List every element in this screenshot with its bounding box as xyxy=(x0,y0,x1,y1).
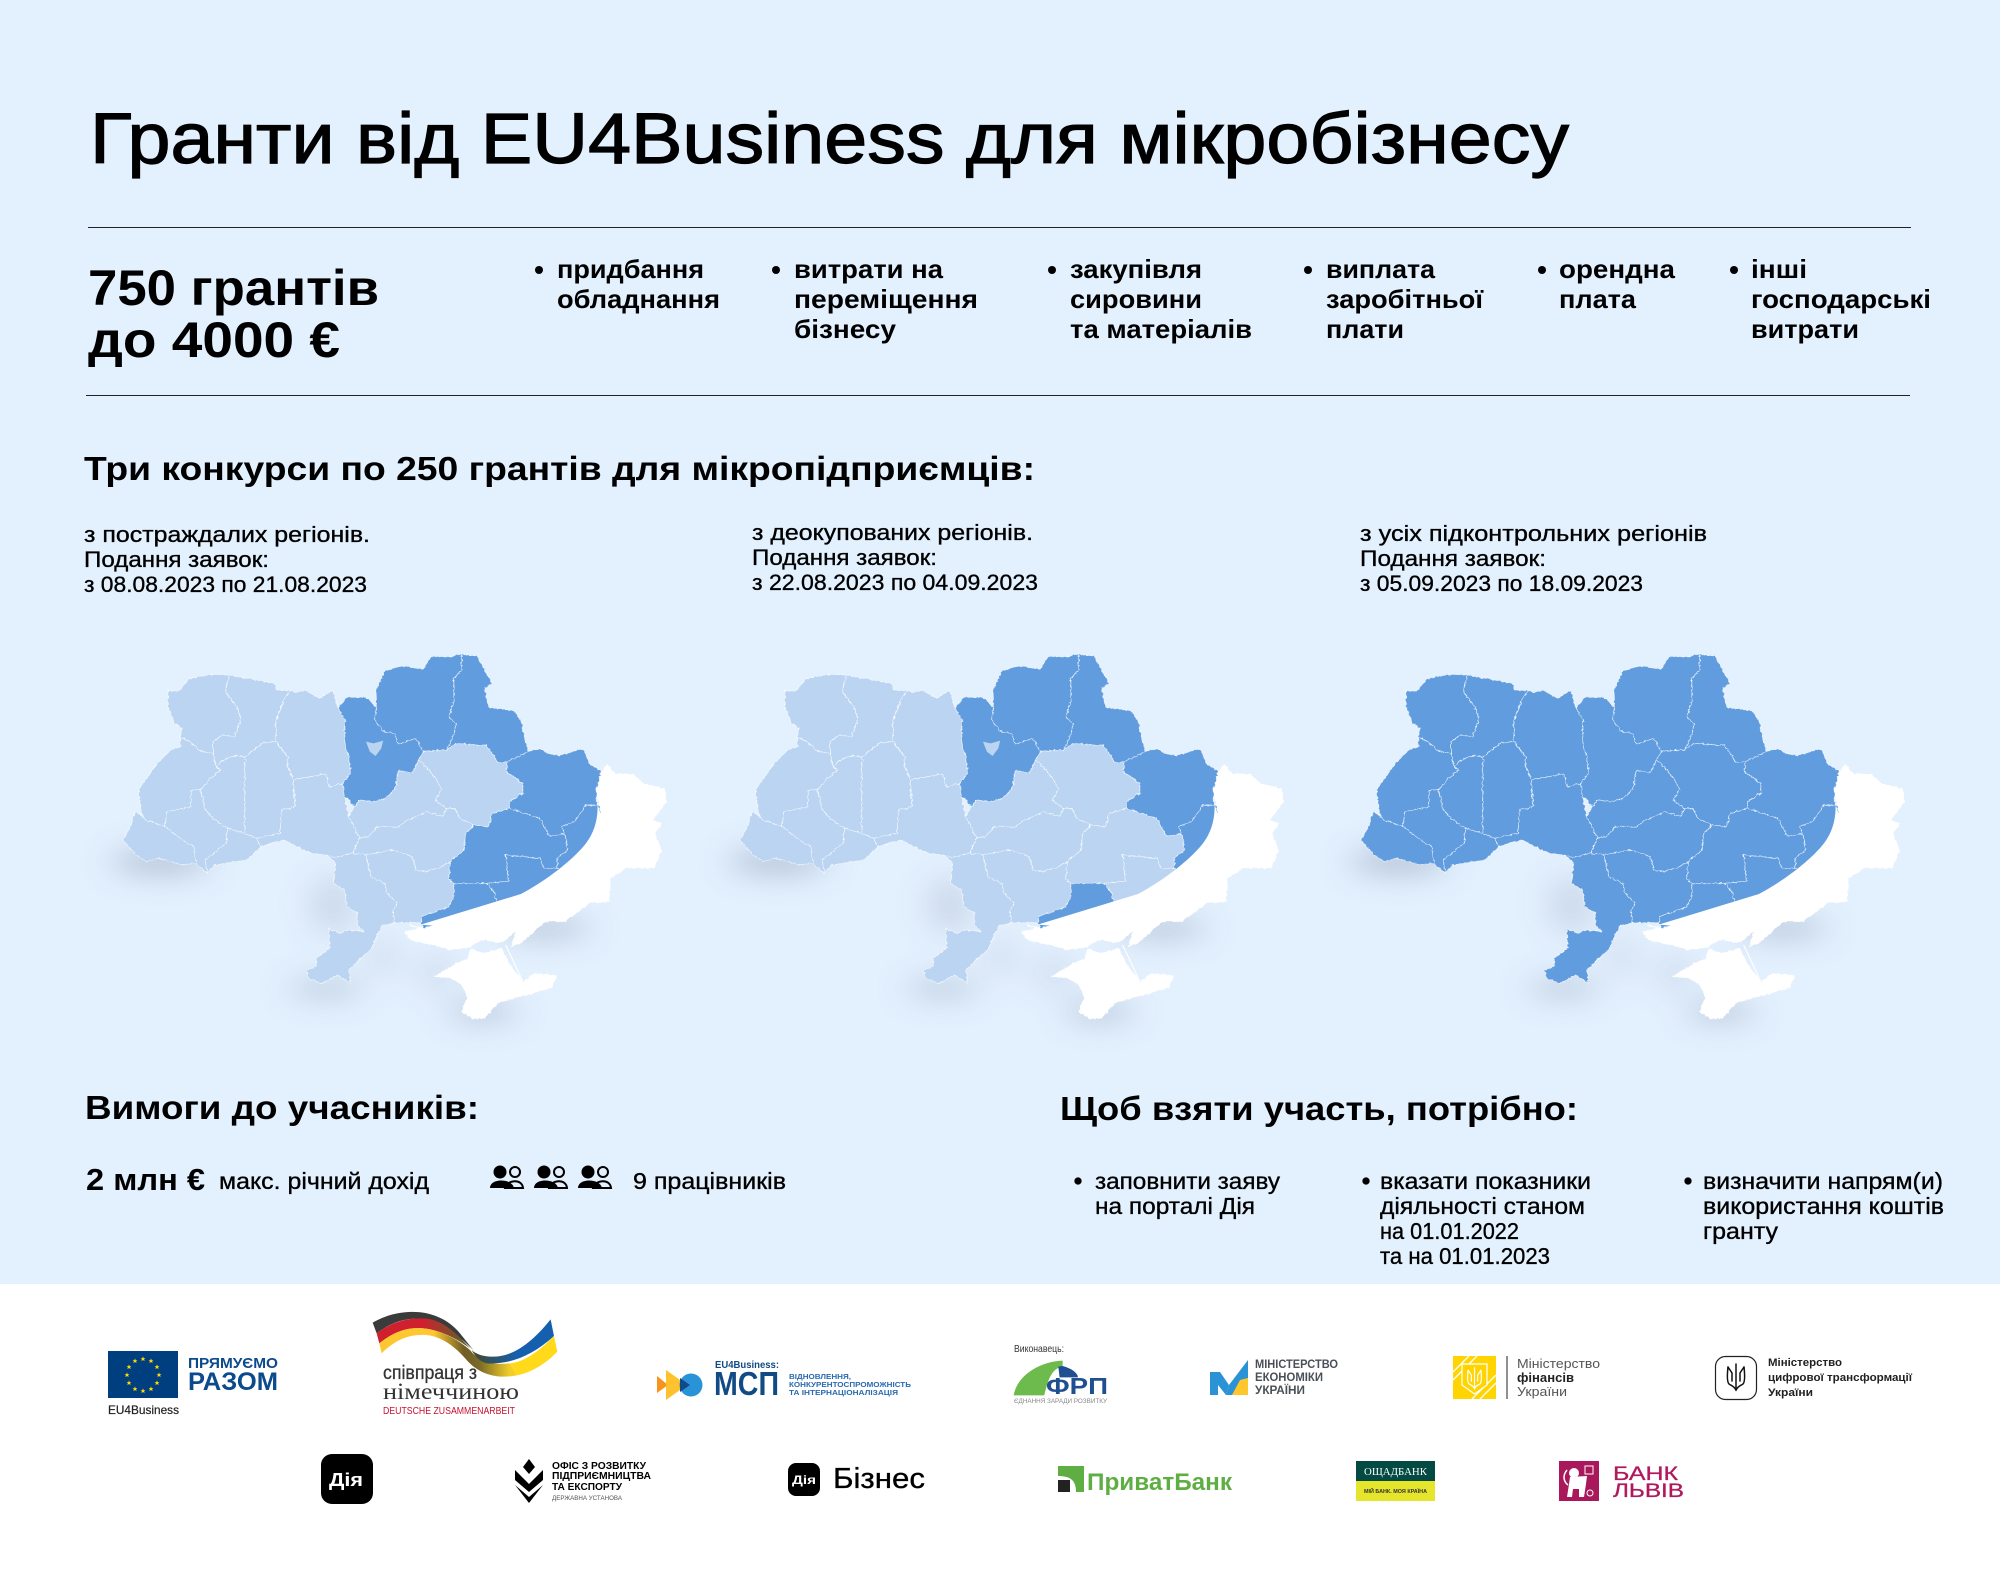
logo: ПриватБанк: ПриватБанк xyxy=(1087,1469,1233,1496)
expense: relocation: витрати на xyxy=(794,254,944,284)
map 1: affected regions xyxy=(111,654,667,1021)
expense: relocation: бізнесу xyxy=(794,314,897,344)
competition 1 text xyxy=(84,522,370,597)
step 3: визначити напрям(и) xyxy=(1703,1168,1943,1194)
expense: rent: орендна xyxy=(1559,254,1676,284)
logo: EU4Business МСП xyxy=(657,1359,912,1402)
logo: cooperation with Germany: DEUTSCHE ZUSAMMENARBEIT xyxy=(383,1406,515,1417)
occupied territories xyxy=(1021,764,1284,1019)
logo: EU4Business xyxy=(108,1351,278,1417)
logo: cooperation with Germany xyxy=(373,1312,557,1417)
logo: Ministry of Finance: Міністерство xyxy=(1517,1356,1600,1371)
requirement: employees: 9 працівників xyxy=(633,1168,786,1194)
step 2: та на 01.01.2023 xyxy=(1380,1243,1550,1269)
expense: raw materials: закупівля xyxy=(1070,254,1202,284)
step 1 xyxy=(1074,1168,1280,1219)
competition 1 text: з 08.08.2023 по 21.08.2023 xyxy=(84,572,367,597)
competition 3 text: Подання заявок: xyxy=(1360,546,1546,571)
requirement: income xyxy=(86,1162,429,1197)
logo: Ministry of Finance: фінансів xyxy=(1517,1370,1574,1385)
logo: Office for Entrepreneurship and Export: ОФІС З РОЗВИТКУ xyxy=(552,1461,647,1472)
title: Гранти від EU4Business для мікробізнесу xyxy=(90,100,1570,179)
step 3: гранту xyxy=(1703,1218,1778,1244)
expense: other xyxy=(1730,254,1931,344)
logo: EU4Business МСП: ТА ІНТЕРНАЦІОНАЛІЗАЦІЯ xyxy=(789,1388,898,1397)
light regions xyxy=(123,674,523,983)
expense: equipment: придбання xyxy=(557,254,704,284)
expense: salaries xyxy=(1304,254,1484,344)
logo: Office for Entrepreneurship and Export: ТА ЕКСПОРТУ xyxy=(552,1482,623,1493)
heading: how to participate: Щоб взяти участь, потрібно: xyxy=(1060,1090,1578,1127)
competition 2 text: з 22.08.2023 по 04.09.2023 xyxy=(752,570,1038,595)
logo: EU4Business МСП: МСП xyxy=(714,1365,779,1402)
logo: cooperation with Germany: співпраця з xyxy=(383,1363,477,1384)
competition 3 text: з усіх підконтрольних регіонів xyxy=(1360,521,1707,546)
map 2: de-occupied regions xyxy=(728,654,1284,1021)
logo: Дія Бізнес xyxy=(788,1463,925,1496)
headline figures: 750 грантів xyxy=(88,260,379,316)
logo: EU4Business МСП: КОНКУРЕНТОСПРОМОЖНІСТЬ xyxy=(789,1380,912,1389)
expense: relocation: переміщення xyxy=(794,284,978,314)
expense: salaries: виплата xyxy=(1326,254,1436,284)
logo: EU4Business МСП: EU4Business: xyxy=(715,1359,779,1371)
logo: EU4Business МСП: ВІДНОВЛЕННЯ, xyxy=(789,1372,851,1381)
logo: Ministry of Economy: МІНІСТЕРСТВО xyxy=(1255,1357,1338,1371)
expense: rent: плата xyxy=(1559,284,1637,314)
headline figures xyxy=(88,260,379,368)
highlighted regions xyxy=(955,654,1226,928)
logo: EU4Business: ПРЯМУЄМО xyxy=(188,1355,278,1372)
map 3: all controlled regions xyxy=(1349,654,1905,1021)
expense: raw materials: сировини xyxy=(1070,284,1202,314)
logo: Дія: Дія xyxy=(329,1470,363,1490)
expense: salaries: заробітньої xyxy=(1326,284,1484,314)
logo: cooperation with Germany: німеччиною xyxy=(383,1379,519,1404)
logo: ФРП xyxy=(1014,1343,1108,1405)
logo: Банк Львів: БАНК xyxy=(1613,1464,1678,1485)
logo: Дія Бізнес: Бізнес xyxy=(833,1463,925,1495)
competition 2 text xyxy=(752,520,1038,595)
logo: Ministry of Finance: України xyxy=(1517,1384,1567,1399)
competition 2 text: Подання заявок: xyxy=(752,545,937,570)
highlighted regions xyxy=(1361,654,1847,983)
icons: employees xyxy=(490,1166,611,1188)
step 3 xyxy=(1684,1168,1944,1244)
expense: raw materials xyxy=(1048,254,1252,344)
expense: salaries: плати xyxy=(1326,314,1404,344)
logo: ФРП: ЄДНАННЯ ЗАРАДИ РОЗВИТКУ xyxy=(1014,1398,1108,1405)
occupied territories xyxy=(404,764,667,1019)
logo: Банк Львів: ЛЬВІВ xyxy=(1613,1481,1684,1502)
step 2 xyxy=(1362,1168,1591,1269)
logo: Office for Entrepreneurship and Export: ПІДПРИЄМНИЦТВА xyxy=(552,1471,651,1482)
step 1: на порталі Дія xyxy=(1095,1193,1255,1219)
logo: Ощадбанк: ОЩАДБАНК xyxy=(1364,1467,1428,1478)
heading: requirements: Вимоги до учасників: xyxy=(85,1089,479,1126)
logo: Дія Бізнес: Дія xyxy=(792,1473,816,1487)
light regions xyxy=(740,674,1185,983)
logo: Ministry of Digital Transformation: Міністерство xyxy=(1768,1357,1842,1369)
highlighted regions xyxy=(338,654,609,928)
competition 2 text: з деокупованих регіонів. xyxy=(752,520,1033,545)
logo: ФРП: ФРП xyxy=(1046,1373,1108,1399)
logo: Ощадбанк xyxy=(1356,1461,1435,1501)
footer band xyxy=(0,1284,2000,1575)
expense: rent xyxy=(1538,254,1676,314)
logo: Office for Entrepreneurship and Export xyxy=(515,1459,651,1503)
expense: raw materials: та матеріалів xyxy=(1070,314,1252,344)
step 2: вказати показники xyxy=(1380,1168,1591,1194)
logo: Ministry of Economy xyxy=(1210,1357,1338,1397)
competition 3 text: з 05.09.2023 по 18.09.2023 xyxy=(1360,571,1643,596)
logo: Банк Львів xyxy=(1559,1461,1684,1502)
logo: Ministry of Economy: ЕКОНОМІКИ xyxy=(1255,1370,1323,1384)
requirement: income: макс. річний дохід xyxy=(219,1168,429,1194)
step 3: використання коштів xyxy=(1703,1193,1944,1219)
logo: ФРП: Виконавець: xyxy=(1014,1343,1064,1355)
requirement: income: 2 млн € xyxy=(86,1162,205,1197)
logo: Ministry of Finance xyxy=(1453,1356,1600,1399)
logo: Office for Entrepreneurship and Export: ДЕРЖАВНА УСТАНОВА xyxy=(552,1495,623,1502)
list: eligible expenses xyxy=(535,254,1931,344)
expense: relocation xyxy=(772,254,978,344)
competition 1 text: Подання заявок: xyxy=(84,547,269,572)
logo: Дія xyxy=(321,1454,373,1504)
logo: Ministry of Digital Transformation xyxy=(1716,1356,1913,1400)
step 2: на 01.01.2022 xyxy=(1380,1218,1519,1244)
logo: Ministry of Digital Transformation: цифрової трансформації xyxy=(1768,1372,1913,1384)
expense: other: витрати xyxy=(1751,314,1859,344)
logo: EU4Business: РАЗОМ xyxy=(188,1368,278,1396)
occupied territories xyxy=(1642,764,1905,1019)
headline figures: до 4000 € xyxy=(88,312,340,368)
competition 1 text: з постраждалих регіонів. xyxy=(84,522,370,547)
heading: three competitions: Три конкурси по 250 грантів для мікропідприємців: xyxy=(84,450,1035,487)
step 1: заповнити заяву xyxy=(1095,1168,1280,1194)
expense: other: інші xyxy=(1751,254,1807,284)
expense: other: господарські xyxy=(1751,284,1931,314)
logo: Ministry of Digital Transformation: України xyxy=(1768,1387,1813,1399)
logo: EU4Business: EU4Business xyxy=(108,1403,179,1417)
step 2: діяльності станом xyxy=(1380,1193,1585,1219)
expense: equipment xyxy=(535,254,720,314)
expense: equipment: обладнання xyxy=(557,284,720,314)
logo: Ощадбанк: МІЙ БАНК. МОЯ КРАЇНА xyxy=(1364,1487,1427,1495)
competition 3 text xyxy=(1360,521,1707,596)
logo: Ministry of Economy: УКРАЇНИ xyxy=(1255,1382,1305,1397)
